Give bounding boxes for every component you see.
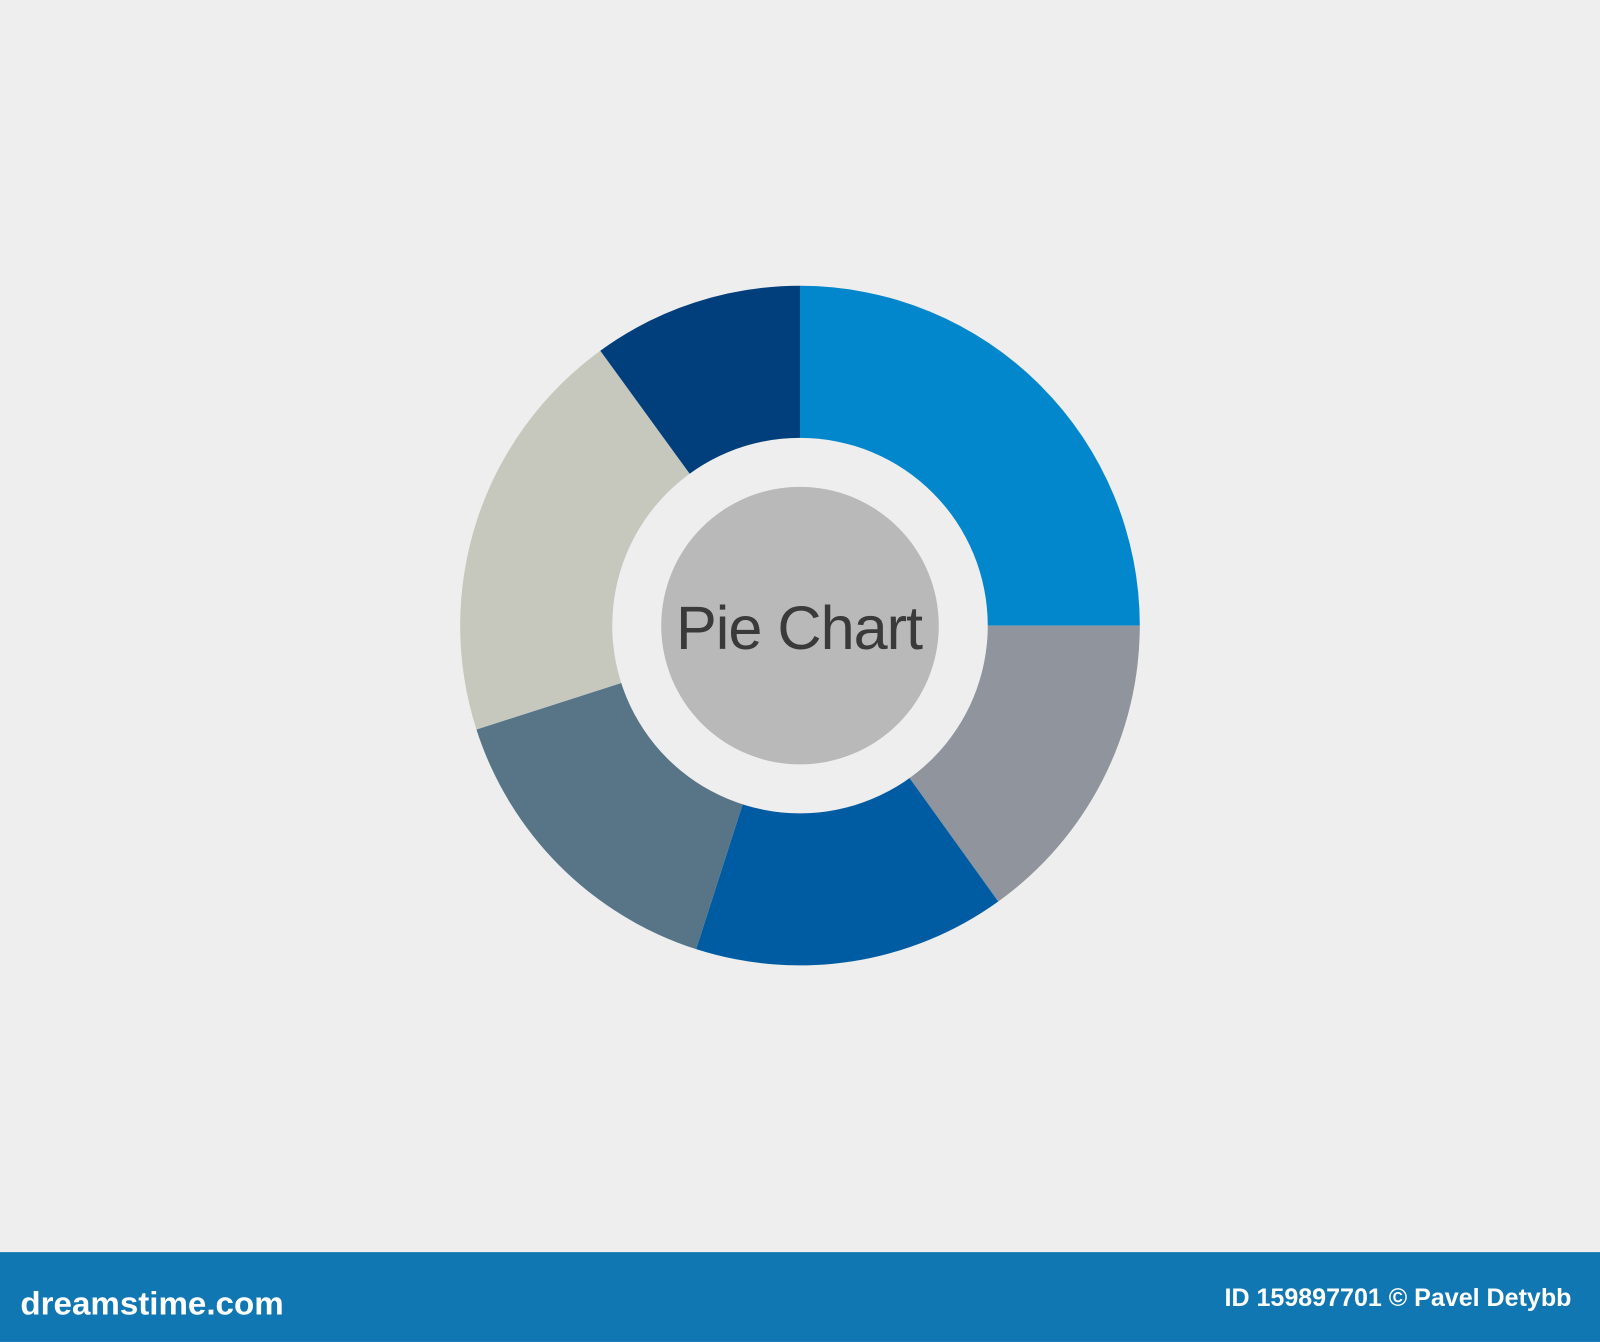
segment: light gray bbox=[460, 351, 800, 729]
white ring bbox=[612, 438, 988, 813]
segment: dark blue bbox=[696, 626, 998, 965]
segment: gray bbox=[800, 626, 1140, 902]
segment: navy bbox=[600, 286, 800, 626]
center circle with label: Pie Chart bbox=[676, 594, 923, 662]
center circle with label bbox=[661, 487, 939, 764]
footer ID text: ID 159897701 © Pavel Detybb bbox=[1224, 1284, 1571, 1312]
footer banner bbox=[0, 1252, 1600, 1342]
donut chart bbox=[460, 286, 1140, 965]
segment: slate bbox=[476, 626, 800, 949]
segment: bright blue bbox=[800, 286, 1140, 626]
footer brand text: dreamstime.com bbox=[20, 1284, 284, 1321]
